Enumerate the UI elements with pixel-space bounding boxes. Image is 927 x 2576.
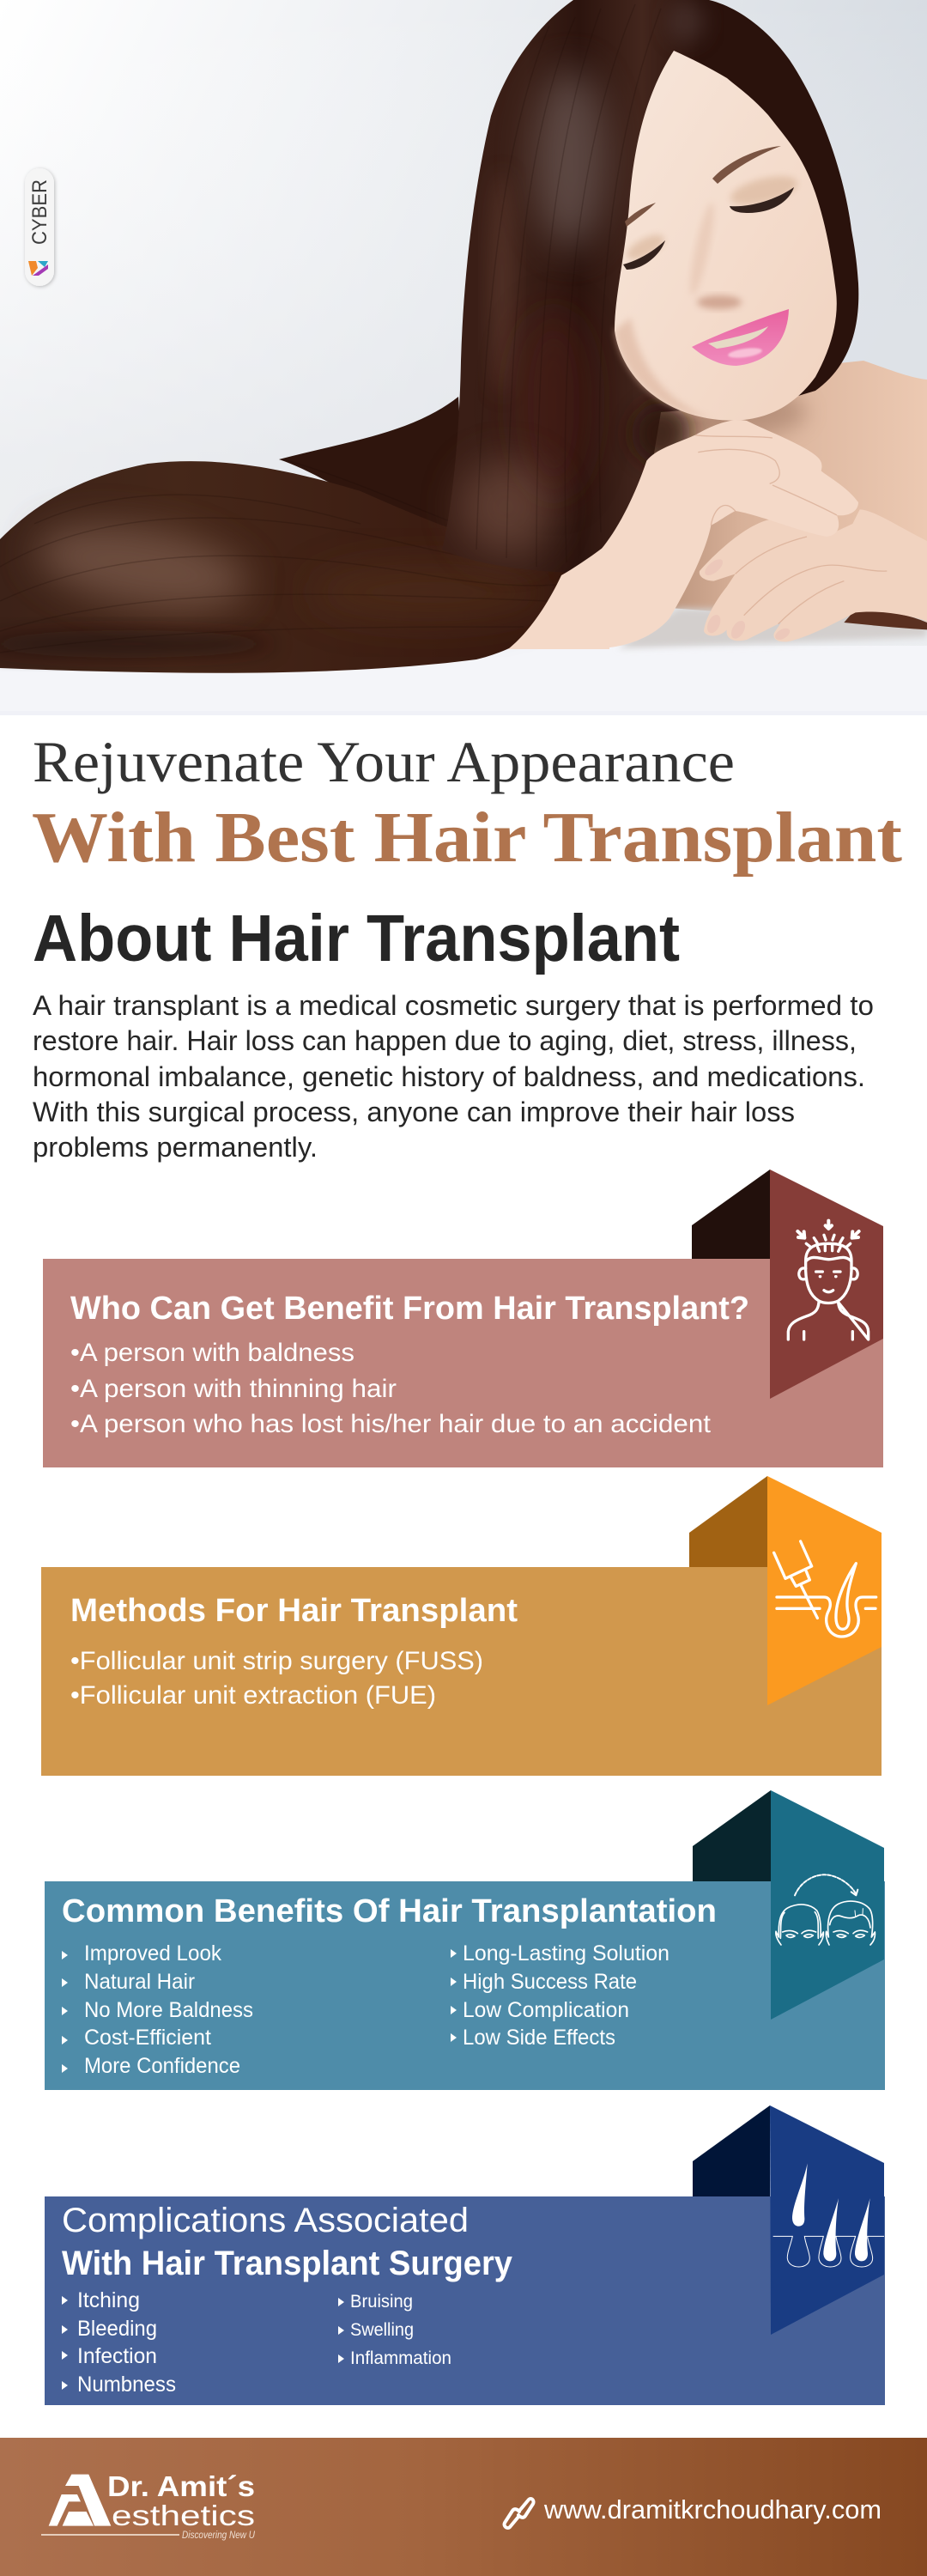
logo name: Dr. Amit´s [107,2470,255,2502]
hair strands on sweep [15,495,533,630]
list: right column: Swelling [350,2320,414,2340]
badge label: CYBER [28,179,52,245]
list: right column [338,2292,451,2368]
list: right column: Low Side Effects [463,2026,615,2050]
neck shadow [632,403,690,465]
upper hand [601,420,858,648]
panel: methods [41,1476,882,1776]
list: left column [62,2288,176,2397]
list: right column: Low Complication [463,1998,629,2022]
logo subtitle: esthetics [112,2500,255,2531]
hair strands on column [476,4,661,567]
title line 1: Rejuvenate Your Appearance [33,729,735,794]
about paragraph [33,990,874,1163]
face [615,51,837,421]
list [70,1647,483,1710]
list: left column: Itching [77,2288,140,2312]
list: •Follicular unit strip surgery (FUSS) [70,1647,483,1675]
list: right column: Bruising [350,2292,413,2312]
hands [601,420,927,648]
footer band [0,2438,927,2576]
list: •Follicular unit extraction (FUE) [70,1681,436,1710]
cyber badge [25,168,54,286]
list: left column: Infection [77,2344,157,2368]
eyelashes [730,187,794,213]
list: left column: Cost-Efficient [84,2026,211,2050]
about heading: About Hair Transplant [33,902,680,975]
finger lines [695,435,887,624]
fingernails [702,556,791,642]
list: left column: More Confidence [84,2054,240,2078]
list: left column: No More Baldness [84,1998,253,2022]
heading: Methods For Hair Transplant [70,1593,518,1629]
hero photo: woman with long straight hair [0,0,927,715]
heading: Complications Associated [62,2202,469,2239]
about paragraph: restore hair. Hair loss can happen due to aging, diet, stress, illness, [33,1025,857,1056]
about paragraph: With this surgical process, anyone can improve their hair loss [33,1097,795,1127]
website: www.dramitkrchoudhary.com [543,2494,882,2524]
logo mark: letter A [49,2475,111,2526]
back hair flowing left [279,397,459,527]
logo rule and tagline: Discovering New U [182,2529,255,2541]
list: left column: Improved Look [84,1941,221,1965]
icon: hair follicle extraction [774,1541,876,1637]
title line 2: With Best Hair Transplant [32,798,902,878]
panel: who can benefit [43,1170,883,1467]
lower hand [700,509,927,641]
hair highlights on sweep [0,510,549,658]
list [70,1339,712,1438]
lips [692,309,789,366]
forearm [508,548,609,649]
about paragraph: A hair transplant is a medical cosmetic surgery that is performed to [33,990,874,1021]
list: left column: Natural Hair [84,1970,195,1994]
heading: With Hair Transplant Surgery [62,2245,513,2282]
heading: Common Benefits Of Hair Transplantation [62,1893,717,1929]
list: right column: Long-Lasting Solution [463,1941,670,1965]
table shadow under hand [618,608,927,648]
chest and shoulder [654,361,927,623]
logo [41,2470,255,2541]
icon: hairline before and after [776,1874,875,1945]
icon: hair follicles [773,2163,884,2267]
list: •A person with thinning hair [70,1375,397,1403]
list: left column [62,1941,253,2078]
heading [62,2202,513,2282]
face shading [615,171,800,419]
lower hair sweep [0,461,597,673]
list: right column: Inflammation [350,2348,451,2368]
list: right column [451,1941,670,2050]
panel: complications [45,2105,885,2405]
list: left column: Numbness [77,2372,176,2397]
about paragraph: problems permanently. [33,1132,318,1163]
main hair silhouette [442,0,858,574]
hair sheen [459,0,706,554]
eyebrows [712,146,781,184]
list: •A person who has lost his/her hair due to an accident [70,1410,712,1438]
about paragraph: hormonal imbalance, genetic history of baldness, and medications. [33,1061,865,1092]
list: left column: Bleeding [77,2317,157,2341]
list: •A person with baldness [70,1339,354,1367]
heading: Who Can Get Benefit From Hair Transplant? [70,1291,749,1327]
icon: man with hair growth arrows [788,1221,869,1340]
sleeve shadow [844,611,927,629]
badge logo [28,261,48,276]
list: right column: High Success Rate [463,1970,637,1994]
icon: link [505,2499,534,2528]
hero bottom edge [0,711,927,715]
panel: common benefits [45,1790,885,2090]
